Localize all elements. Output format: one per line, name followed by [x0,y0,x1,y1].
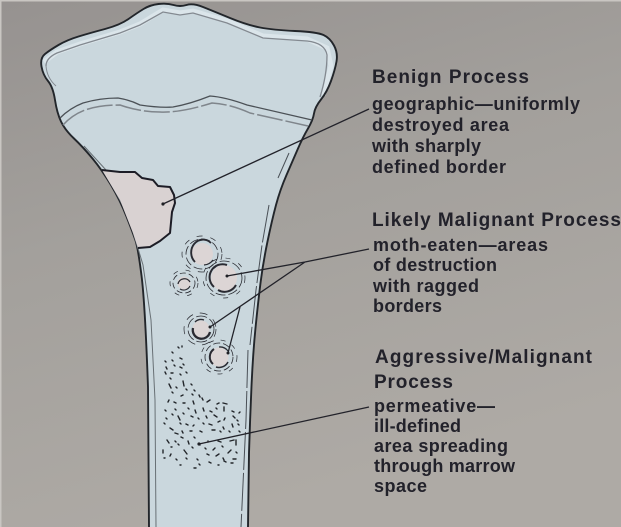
pale rim [44,10,331,95]
description: benign: geographic—uniformly [372,94,580,114]
heading: likely malignant process: Likely Malignant Process [372,210,621,231]
heading: aggressive malignant process: Aggressive/Malignant [375,347,593,368]
description: permeative: through marrow [374,456,516,476]
leader: moth-eaten [210,249,369,353]
heading: benign process: Benign Process [372,67,529,88]
text block: likely malignant process [372,210,621,316]
heading: aggressive malignant process: Process [374,372,453,393]
inner cortex line top [46,12,327,97]
heading: aggressive malignant process [374,347,593,393]
description: benign: destroyed area [372,115,510,135]
leader dots [161,202,230,446]
description: benign [371,94,580,177]
description: moth-eaten: of destruction [373,255,497,275]
description: permeative [374,396,516,496]
text block: benign process [371,67,580,177]
description: permeative: ill-defined [374,416,461,436]
moth-eaten lesions [170,236,245,374]
leader: permeative [199,407,369,444]
description: benign: defined border [372,157,506,177]
leader: benign [163,109,369,204]
bone illustration [41,4,337,527]
text block: aggressive malignant process [374,347,593,496]
epiphyseal line [60,96,312,120]
description: moth-eaten: moth-eaten—areas [373,235,548,255]
description: permeative: space [374,476,427,496]
description: benign: with sharply [371,136,481,156]
leader lines [163,109,369,444]
description: permeative: area spreading [374,436,508,456]
description: moth-eaten: borders [373,296,442,316]
permeative speckles [163,346,240,468]
bone body [41,4,337,527]
description: permeative: permeative— [374,396,495,416]
description: moth-eaten [372,235,548,316]
description: moth-eaten: with ragged [372,276,479,296]
geographic lesion [102,170,175,248]
bone outline [41,4,337,527]
inner cortex lines shaft [84,146,156,527]
